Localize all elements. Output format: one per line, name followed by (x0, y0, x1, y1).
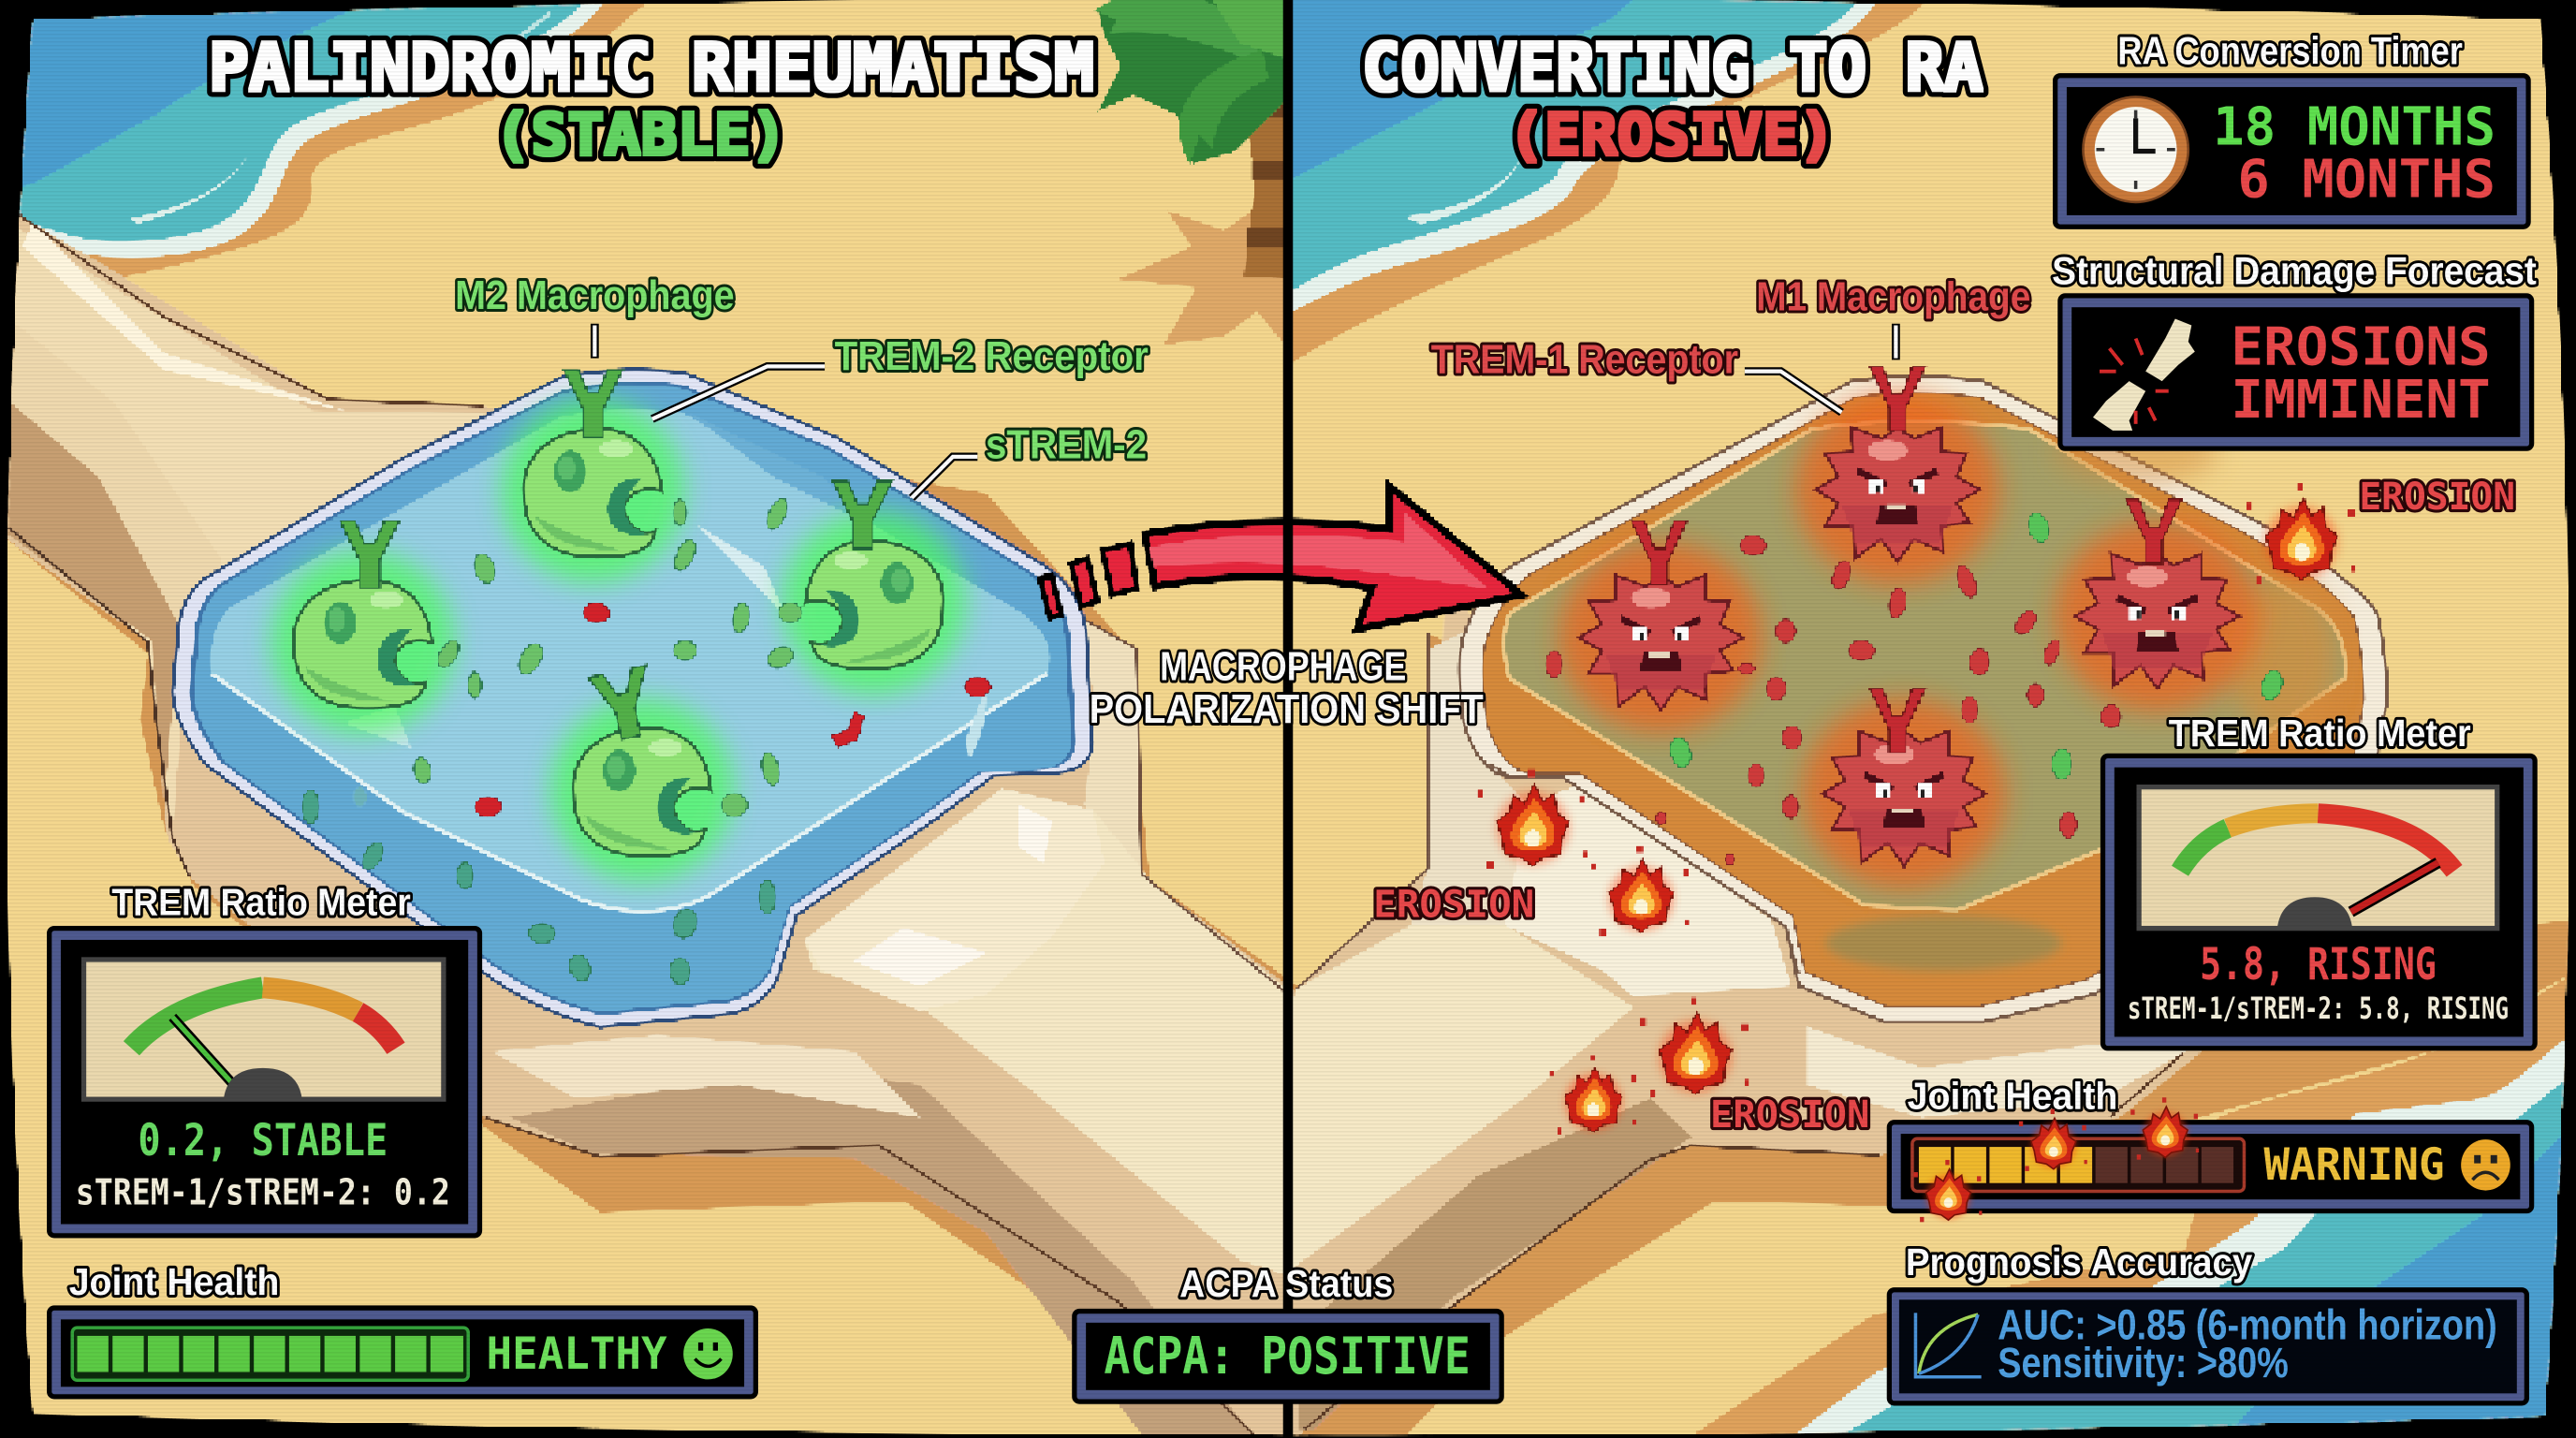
panel: structural damage forecast: EROSIONS (2231, 317, 2491, 378)
panel: prognosis accuracy: Sensitivity: >80% (1998, 1339, 2289, 1387)
callouts: left side: M2 Macrophage (455, 272, 735, 318)
panel: joint health warning (1889, 1075, 2532, 1222)
icon: worried face (2461, 1139, 2510, 1191)
sTREM-2 particles (green) and red particles (302, 496, 801, 984)
panel: TREM ratio meter (rising): 5.8, RISING (2200, 939, 2437, 990)
title: Converting to RA (Erosive): (EROSIVE) (1508, 102, 1835, 169)
right inflamed capsule (1459, 376, 2387, 1022)
M2 macrophages with TREM-2 receptors (271, 370, 966, 882)
M1 macrophages with TREM-1 receptors (1559, 366, 2259, 889)
callouts: right side: EROSION (1710, 1093, 1869, 1137)
icon: explosions on bar (1914, 1097, 2199, 1222)
panel: joint health healthy: Joint Health (69, 1260, 279, 1303)
panel: joint health warning: Joint Health (1908, 1075, 2117, 1118)
callouts: right side: EROSION (2359, 475, 2515, 519)
right shoreline water bottom (1676, 970, 2576, 1438)
panel: ACPA status: ACPA Status (1179, 1262, 1393, 1305)
callouts: left side (455, 272, 1149, 498)
callouts: left side: TREM-2 Receptor (835, 333, 1149, 379)
panel: structural damage forecast (2052, 249, 2537, 448)
panel: RA conversion timer: 18 MONTHS (2213, 96, 2496, 157)
chart: ROC curve icon (1915, 1313, 1982, 1377)
icon: broken bone (2093, 318, 2195, 431)
bone erosion explosions (1477, 483, 2356, 1135)
callouts: right side: M1 Macrophage (1756, 274, 2030, 320)
left synovial capsule (172, 370, 1092, 1027)
left shoreline water (0, 0, 661, 296)
health bar (72, 1328, 468, 1380)
label: macrophage polarization shift (1090, 644, 1484, 732)
panel: RA conversion timer: RA Conversion Timer (2117, 28, 2463, 72)
callouts: right side: EROSION (1373, 882, 1534, 926)
title: Converting to RA (Erosive) (1362, 30, 1983, 169)
panel: structural damage forecast: IMMINENT (2231, 370, 2491, 431)
right joint bones (1296, 592, 2576, 1438)
centre divider (1283, 0, 1293, 1438)
panel: TREM ratio meter (stable) (50, 881, 479, 1236)
red and green particles in fluid (1546, 536, 2121, 864)
panel: TREM ratio meter (rising): TREM Ratio Meter (2169, 712, 2471, 755)
icon: clock (2083, 97, 2188, 202)
right shoreline water top (1290, 0, 1936, 365)
palm tree and shadow (1094, 0, 1288, 348)
left joint bones (0, 211, 1298, 1438)
panel: ACPA status (1075, 1262, 1501, 1401)
gauge: needle low in green (84, 960, 444, 1101)
callouts: right side (1373, 274, 2515, 1137)
panel: RA conversion timer (2056, 28, 2528, 227)
callouts: left side: sTREM-2 (986, 422, 1147, 468)
callouts: right side: TREM-1 Receptor (1431, 336, 1738, 382)
label: macrophage polarization shift: MACROPHAGE (1160, 644, 1406, 690)
panel: prognosis accuracy: Prognosis Accuracy (1906, 1240, 2253, 1284)
panel: TREM ratio meter (rising) (2103, 712, 2535, 1049)
panel: joint health healthy: HEALTHY (487, 1328, 667, 1380)
panel: TREM ratio meter (stable): 0.2, STABLE (138, 1115, 388, 1167)
warning bar (1912, 1138, 2244, 1191)
title: Palindromic Rheumatism (Stable): (STABLE) (494, 102, 787, 169)
title: Converting to RA (Erosive): CONVERTING TO RA (1362, 30, 1983, 107)
label: macrophage polarization shift: POLARIZATION SHIFT (1090, 686, 1484, 732)
panel: joint health warning: WARNING (2264, 1139, 2445, 1191)
gauge: needle high in red (2139, 787, 2497, 930)
panel: joint health healthy (50, 1260, 755, 1397)
panel: prognosis accuracy (1889, 1240, 2526, 1403)
panel: structural damage forecast: Structural Damage Forecast (2052, 249, 2537, 293)
title: Palindromic Rheumatism (Stable): PALINDROMIC RHEUMATISM (209, 30, 1094, 107)
panel: RA conversion timer: 6 MONTHS (2237, 150, 2496, 211)
polarization shift arrow (1040, 487, 1521, 629)
panel: TREM ratio meter (stable): sTREM-1/sTREM-2: 0.2 (76, 1171, 450, 1213)
icon: smiley (683, 1328, 733, 1379)
title: Palindromic Rheumatism (Stable) (209, 30, 1094, 169)
panel: TREM ratio meter (stable): TREM Ratio Meter (111, 881, 411, 924)
panel: ACPA status: ACPA: POSITIVE (1104, 1327, 1471, 1386)
